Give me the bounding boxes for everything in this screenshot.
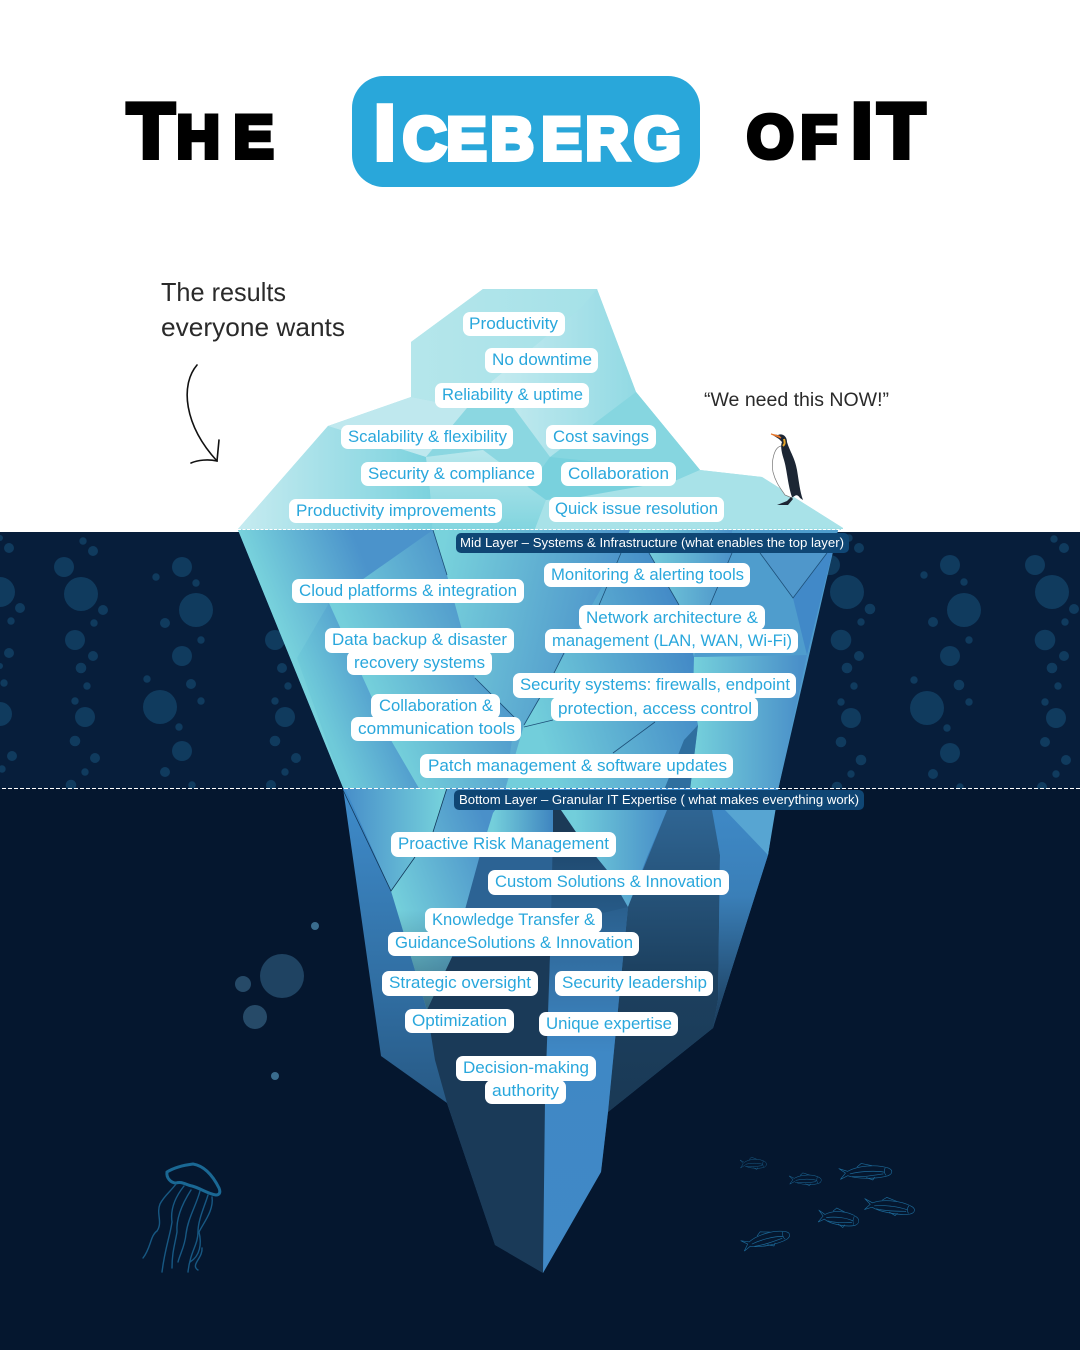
- annotation: the results everyone wants: everyone wants: [161, 312, 345, 342]
- label: Decision-making authority: [456, 1056, 596, 1104]
- label: Security systems: protection, access control: [558, 699, 752, 718]
- label: Data backup and disaster recovery systems: recovery systems: [354, 653, 485, 672]
- label: No downtime: No downtime: [492, 350, 592, 369]
- title word: The: T: [127, 86, 175, 174]
- label: Network architecture and management: Network architecture &: [586, 608, 759, 627]
- label: Network architecture and management: [545, 605, 798, 653]
- label: Reliability and uptime: Reliability & uptime: [442, 385, 583, 404]
- section label: bottom layer: [454, 790, 864, 810]
- quote: we need this now: “We need this NOW!”: [704, 390, 889, 411]
- label: Decision-making authority: Decision-making: [463, 1058, 589, 1077]
- label: Optimization: [405, 1009, 514, 1033]
- label: Decision-making authority: authority: [492, 1081, 560, 1100]
- penguin: [771, 434, 803, 505]
- label: Cloud platforms and integration: Cloud platforms & integration: [299, 581, 517, 600]
- label: Scalability and flexibility: Scalability & flexibility: [348, 427, 507, 446]
- label: Network architecture and management: management (LAN, WAN, Wi-Fi): [552, 631, 792, 650]
- label: Knowledge Transfer and Guidance: Knowledge Transfer &: [432, 910, 596, 929]
- deep bubbles: [235, 922, 319, 1080]
- label: Data backup and disaster recovery systems: [325, 628, 514, 675]
- fish school: [740, 1157, 916, 1253]
- label: Patch management and software updates: Patch management & software updates: [428, 756, 727, 775]
- title word: The: HE: [176, 104, 274, 170]
- label: Security leadership: [555, 971, 713, 996]
- ocean: deep water: [0, 789, 1080, 1350]
- label: Data backup and disaster recovery systems: Data backup & disaster: [332, 630, 507, 649]
- section label: mid layer: Mid Layer – Systems & Infrastructure (what enables the top layer): [460, 536, 844, 550]
- annotation: the results everyone wants: [161, 277, 345, 342]
- label: Unique expertise: Unique expertise: [546, 1014, 672, 1033]
- label: Productivity: Productivity: [469, 314, 558, 333]
- label: Security systems: Security systems: firewalls, endpoint: [520, 675, 790, 694]
- iceberg bottom layer: [343, 788, 778, 1273]
- label: Collaboration and communication tools: communication tools: [358, 719, 515, 738]
- arrow pointing to iceberg: [187, 365, 219, 463]
- label: Proactive Risk Management: Proactive Risk Management: [398, 834, 609, 853]
- label: No downtime: [485, 348, 598, 373]
- dashed line: layer divider: [2, 788, 1080, 790]
- annotation: the results everyone wants: The results: [161, 277, 286, 307]
- label: Security leadership: Security leadership: [562, 973, 707, 992]
- label: Knowledge Transfer and Guidance: [388, 908, 639, 956]
- title word: Iceberg: I: [374, 88, 396, 176]
- title word: IT: IT: [851, 86, 925, 174]
- section label: bottom layer: Bottom Layer – Granular IT Expertise ( what makes everything work): [459, 793, 859, 807]
- label: Security and compliance: Security & compliance: [368, 464, 535, 483]
- label: Custom Solutions and Innovation: Custom Solutions & Innovation: [495, 872, 722, 891]
- label: Cost savings: Cost savings: [553, 427, 649, 446]
- label: Strategic oversight: [382, 971, 538, 996]
- label: Collaboration: Collaboration: [568, 464, 669, 483]
- section label: mid layer: [456, 533, 849, 553]
- label: Collaboration: [561, 462, 676, 486]
- iceberg above water: [238, 289, 843, 530]
- title: [127, 76, 925, 187]
- jellyfish: [143, 1164, 220, 1272]
- label: Quick issue resolution: Quick issue resolution: [555, 499, 718, 518]
- title word: Iceberg: CEBERG: [403, 106, 681, 172]
- label: Collaboration and communication tools: [351, 694, 521, 741]
- dashed line: water surface: [238, 528, 843, 530]
- title word: of: OF: [747, 104, 837, 170]
- label: Knowledge Transfer and Guidance: GuidanceSolutions & Innovation: [395, 933, 633, 952]
- iceberg middle layer: [238, 530, 838, 790]
- label: Collaboration and communication tools: Collaboration &: [379, 696, 494, 715]
- label: Productivity improvements: Productivity improvements: [296, 501, 496, 520]
- label: Security systems: [513, 673, 796, 721]
- bubbles pattern: [0, 534, 1079, 792]
- label: Monitoring and alerting tools: Monitoring & alerting tools: [551, 565, 744, 584]
- label: Strategic oversight: Strategic oversight: [389, 973, 531, 992]
- label: Optimization: Optimization: [412, 1011, 507, 1030]
- ocean: mid water: [0, 532, 1080, 789]
- title badge: [352, 76, 700, 187]
- label: Productivity: [463, 312, 565, 336]
